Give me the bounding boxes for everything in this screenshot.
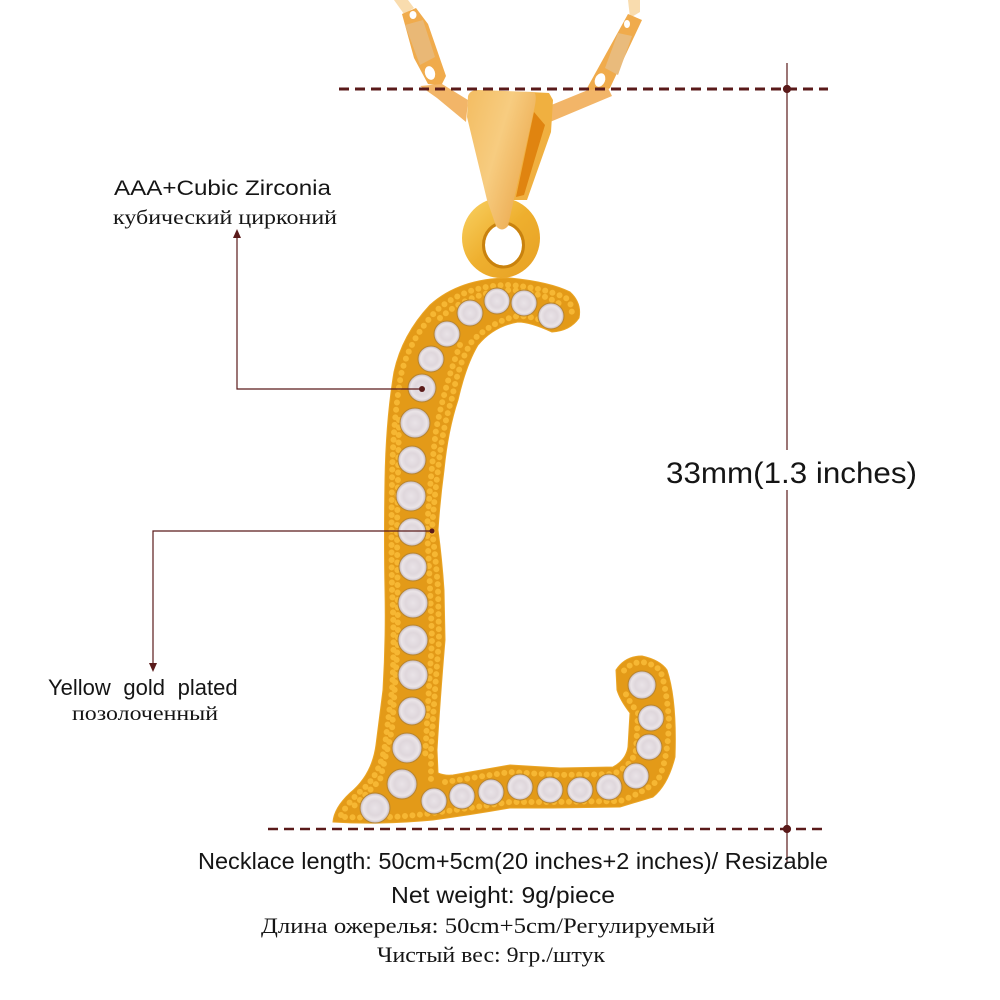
russian necklace length: Длина ожерелья: 50cm+5cm/Регулируемый [261, 913, 715, 938]
bail front [467, 90, 536, 230]
necklace length: Necklace length: 50cm+5cm(20 inches+2 inches)/ Resizable [198, 848, 828, 874]
bead row: inner [431, 316, 552, 780]
callout: cubic zirconia [113, 177, 425, 392]
bead row: second inner [425, 345, 460, 760]
bead row: bottom [345, 662, 669, 818]
bead row: arc top [440, 290, 560, 318]
bead row: outer [341, 285, 572, 815]
pendant bail and ring [462, 90, 553, 278]
chain: left side [394, 0, 468, 122]
callout: yellow gold plated [48, 528, 434, 725]
gold body [333, 278, 675, 823]
top dashed measure line [339, 88, 828, 90]
bead texture [341, 285, 669, 818]
callout text: russian: кубический цирконий [113, 207, 337, 229]
bead row: top of foot [445, 690, 638, 782]
russian net weight: Чистый вес: 9гр./штук [377, 942, 605, 967]
callout text: russian: позолоченный [72, 703, 218, 725]
letter L pendant [333, 278, 675, 823]
callout text: AAA+Cubic Zirconia: AAA+Cubic Zirconia [114, 177, 331, 200]
chain: right side [544, 0, 642, 122]
bail interior [516, 112, 545, 197]
bottom specifications [198, 848, 828, 967]
bottom dashed measure line [268, 828, 825, 830]
zirconia stones [360, 288, 664, 823]
jump ring [462, 198, 540, 278]
necklace chain [394, 0, 642, 122]
net weight: Net weight: 9g/piece [391, 882, 615, 908]
dimension label: 33mm(1.3 inches) [666, 457, 917, 490]
callout text: Yellow gold plated: Yellow gold plated [48, 675, 238, 700]
bead row: filler left [352, 420, 399, 808]
ring inner shadow [484, 223, 524, 267]
vertical dimension line [784, 63, 790, 862]
bail back [512, 92, 553, 200]
